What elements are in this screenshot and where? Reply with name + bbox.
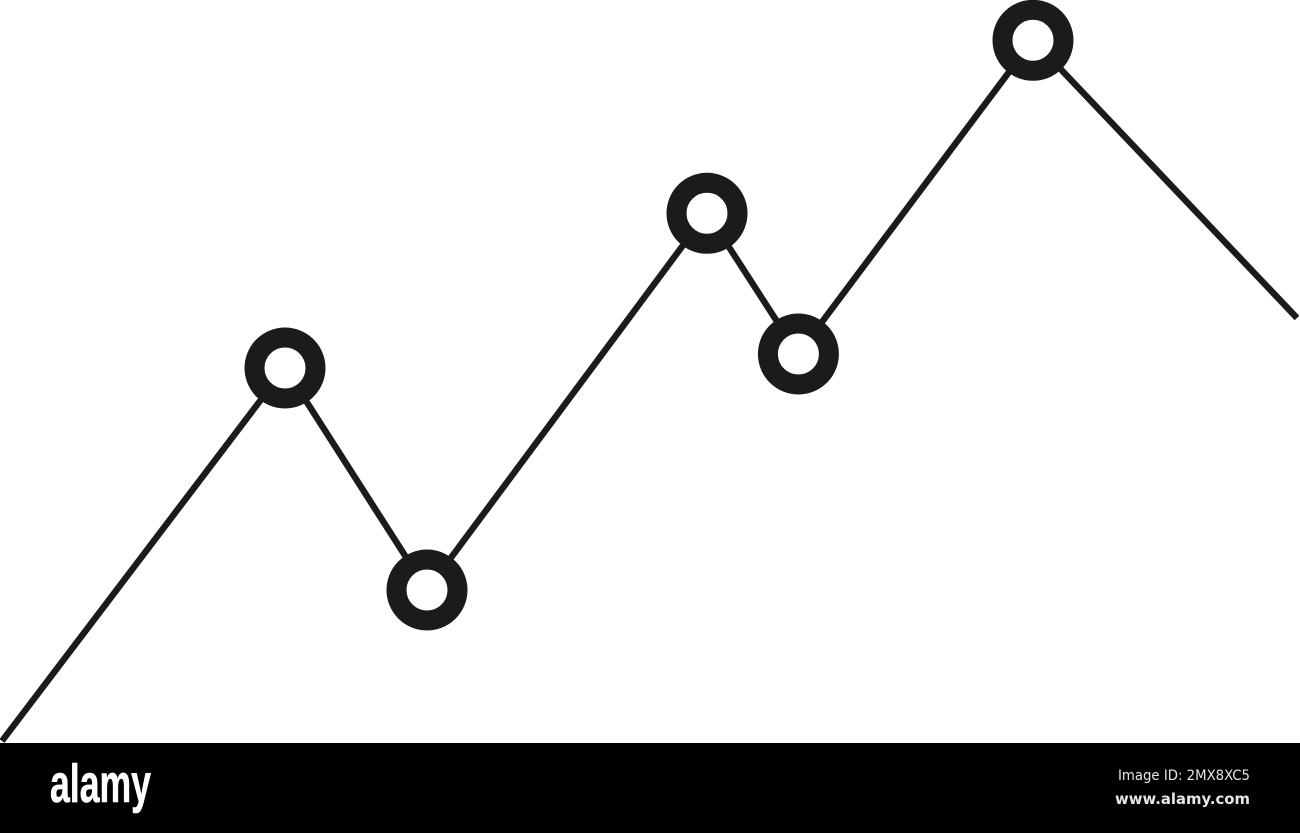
data point 5 [1002,10,1064,71]
data point 3 [676,183,738,244]
data point 4 [768,324,829,384]
website: www.alamy.com [1115,790,1250,808]
data point 2 [396,560,458,620]
data point 1 [254,338,316,398]
footer bar [0,743,1300,833]
image id: Image ID: 2MX8XC5 [1118,768,1250,784]
alamy logo: alamy [50,754,151,814]
